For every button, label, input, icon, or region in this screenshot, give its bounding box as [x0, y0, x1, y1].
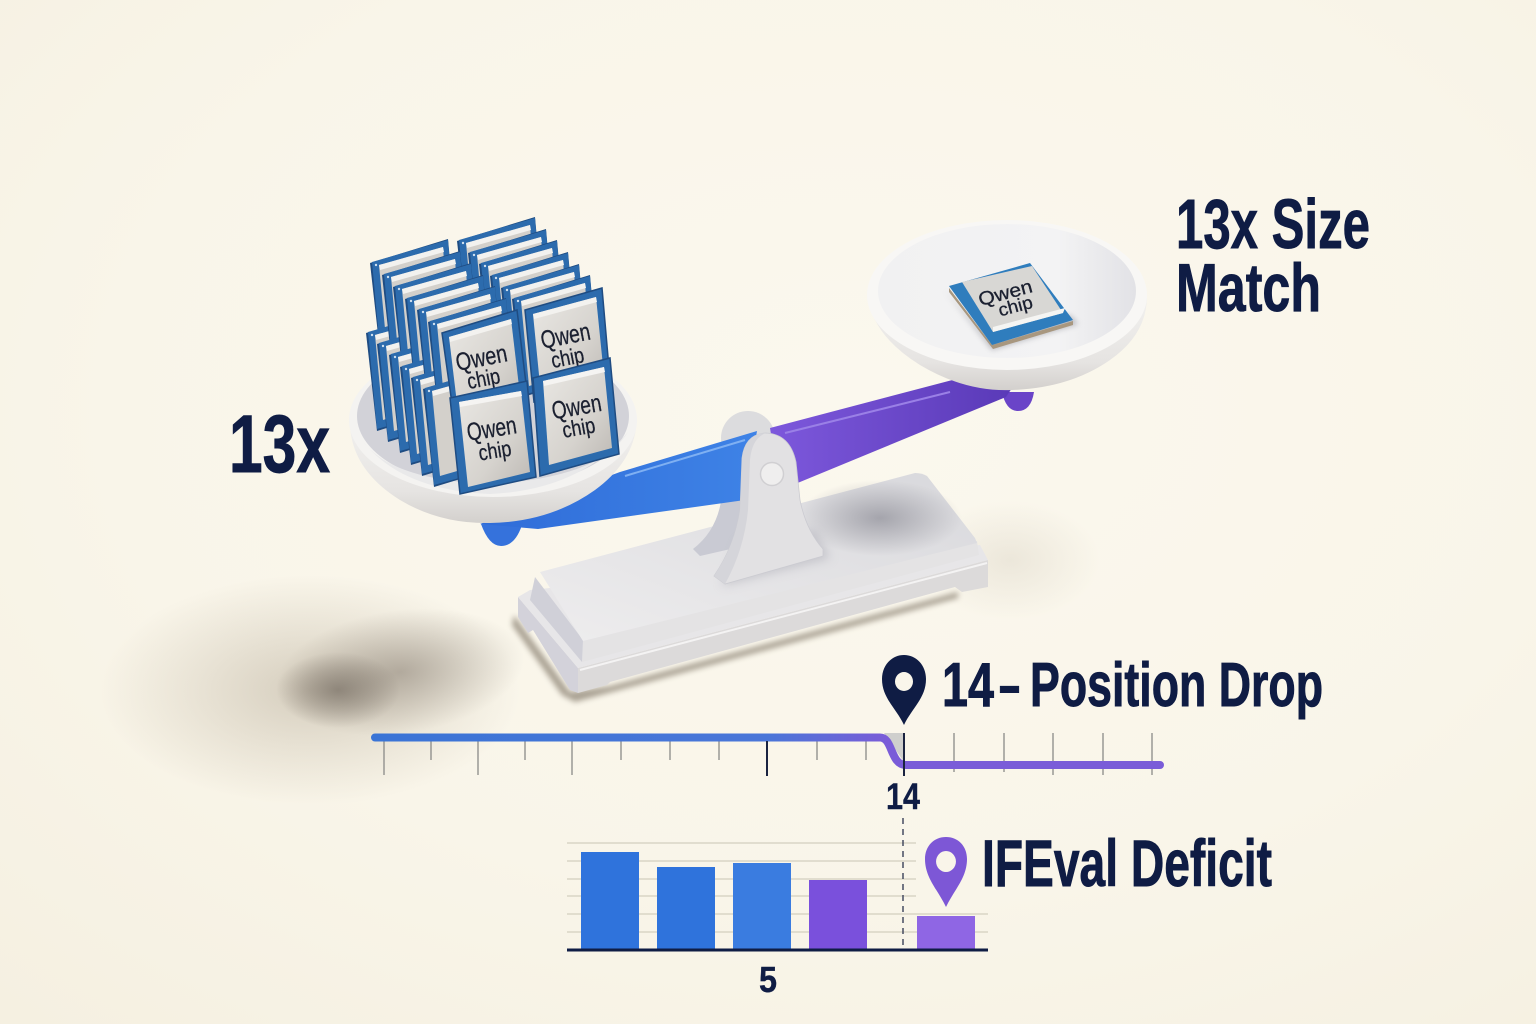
- right pan with chip: [867, 220, 1147, 390]
- block top: [540, 473, 977, 641]
- chip: second row left: Qwen: [453, 339, 510, 377]
- chip: front left: [450, 381, 536, 494]
- pivot pin: [760, 462, 784, 486]
- chip: front right: [533, 358, 619, 476]
- chip: front right: Qwen: [550, 389, 604, 425]
- ground shadow: [100, 500, 1100, 805]
- pin: purple: [925, 837, 967, 907]
- beam: purple half: [770, 378, 1034, 490]
- heading: 14-Position Drop: 14: [942, 651, 994, 720]
- chip: second row left: [442, 310, 528, 425]
- pivot stand back: [693, 411, 775, 556]
- block left face: [530, 577, 583, 662]
- chip: front left: Qwen: [465, 411, 519, 447]
- chip: second row right: [525, 288, 610, 402]
- tick label: 14: 14: [886, 776, 920, 817]
- chip: front right: chip: [560, 412, 597, 443]
- single chip: [945, 263, 1078, 350]
- label: 13x Size Match: Match: [1176, 250, 1321, 326]
- pin: navy: [882, 655, 926, 725]
- left pan with chips: [349, 217, 637, 523]
- chip: second row right: Qwen: [538, 318, 593, 355]
- plinth front face: [578, 560, 988, 693]
- single chip: Qwen: [976, 276, 1035, 311]
- heading: IFEval Deficit: IFEval Deficit: [982, 826, 1272, 900]
- pivot post: [714, 433, 830, 586]
- plinth left face: [518, 597, 578, 693]
- scale base: [512, 473, 988, 702]
- timeline: [375, 733, 1160, 817]
- chip: second row right: chip: [549, 342, 586, 373]
- left chip stack: [366, 239, 515, 487]
- chip: second row left: chip: [465, 363, 502, 394]
- base contact shadow: [512, 592, 958, 702]
- heading: 14-Position Drop: Position Drop: [1030, 651, 1323, 720]
- shadow on base: [798, 480, 962, 556]
- block front face: [582, 541, 979, 662]
- knob: left: [481, 524, 522, 546]
- label: 13x Size Match: 13x Size: [1176, 185, 1370, 263]
- plinth ledge: [518, 545, 988, 668]
- label: 13x: 13x: [229, 399, 330, 490]
- beam: blue half: [480, 431, 757, 546]
- right chip stack: [457, 217, 599, 397]
- chip: front left: chip: [477, 436, 513, 466]
- axis label: 5: 5: [759, 959, 777, 1000]
- bar chart: [567, 818, 988, 1000]
- knob: right: [1002, 392, 1034, 411]
- heading: 14-Position Drop: –: [999, 651, 1020, 720]
- label: 13x Size Match: [1176, 185, 1370, 326]
- single chip: chip: [996, 292, 1035, 320]
- heading: 14-Position Drop: [942, 651, 1323, 720]
